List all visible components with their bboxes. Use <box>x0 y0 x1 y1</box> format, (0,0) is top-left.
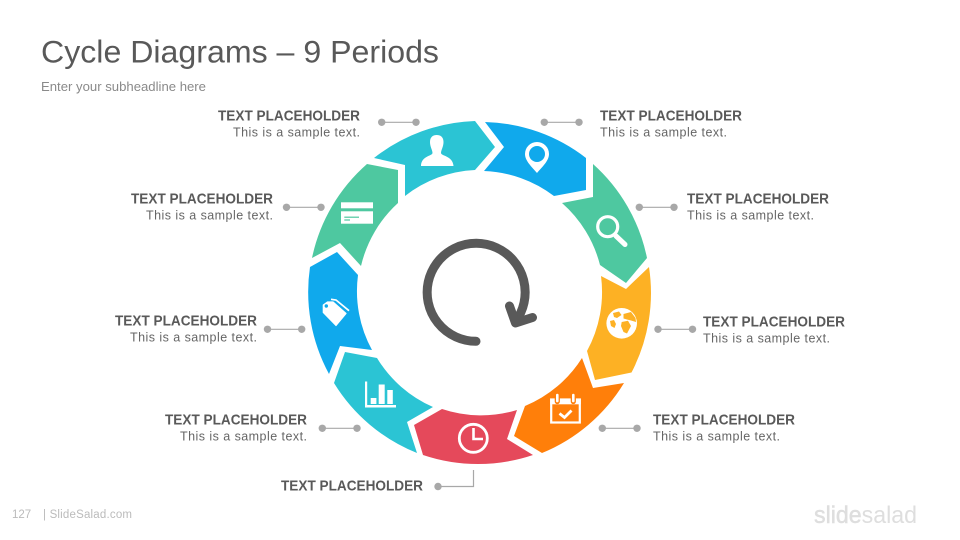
segment: yellow right with globe icon <box>587 267 651 380</box>
segment: teal lower left with bar chart icon <box>334 352 433 453</box>
cycle ring <box>308 121 651 464</box>
title: Cycle Diagrams – 9 Periods <box>41 34 439 70</box>
label: middle left <box>115 313 305 345</box>
icon: globe <box>606 308 637 339</box>
label: top right: This is a sample text. <box>600 126 727 140</box>
label: bottom <box>281 470 474 495</box>
subheadline: Enter your subheadline here <box>41 80 206 94</box>
label: top right <box>541 108 742 140</box>
label: middle right <box>654 314 845 346</box>
label: upper right <box>636 191 829 223</box>
label: upper right: This is a sample text. <box>687 209 814 223</box>
icon: map pin <box>525 142 549 173</box>
icon: card <box>341 202 373 224</box>
label: upper left: TEXT PLACEHOLDER <box>131 191 273 208</box>
label: lower right <box>599 412 795 444</box>
segment: green right with magnifier icon <box>562 164 647 283</box>
label: lower left: TEXT PLACEHOLDER <box>165 412 307 429</box>
label: lower right: TEXT PLACEHOLDER <box>653 412 795 429</box>
icon: price tag <box>323 299 349 326</box>
label: upper left <box>131 191 325 223</box>
label: top left: This is a sample text. <box>233 126 360 140</box>
label: upper right: TEXT PLACEHOLDER <box>687 191 829 208</box>
label: middle right: This is a sample text. <box>703 332 830 346</box>
segment: blue top with pin icon <box>484 122 586 196</box>
center cycle arrow <box>427 243 532 341</box>
label: lower left <box>165 412 361 444</box>
icon: person <box>421 135 454 166</box>
label: top right: TEXT PLACEHOLDER <box>600 108 742 125</box>
label: middle left: TEXT PLACEHOLDER <box>115 313 257 330</box>
segment: orange with calendar icon <box>514 358 624 453</box>
icon: magnifier <box>598 217 625 244</box>
segment: teal top with person icon <box>374 121 495 196</box>
segment: green left with card icon <box>312 164 398 266</box>
segment: blue left with tag icon <box>308 252 372 374</box>
label: bottom: TEXT PLACEHOLDER <box>281 478 423 495</box>
icon: clock <box>459 424 487 452</box>
icon: calendar <box>550 395 581 422</box>
segment: red bottom with clock icon <box>414 409 533 464</box>
label: lower left: This is a sample text. <box>180 430 307 444</box>
label: top left <box>218 108 420 140</box>
icon: bar chart <box>365 382 396 408</box>
logo wordmark: slidesalad <box>814 502 917 529</box>
footer site name: | SlideSalad.com <box>43 509 132 521</box>
label: lower right: This is a sample text. <box>653 430 780 444</box>
footer page number: 127 <box>12 509 31 521</box>
label: middle left: This is a sample text. <box>130 331 257 345</box>
label: upper left: This is a sample text. <box>146 209 273 223</box>
label: top left: TEXT PLACEHOLDER <box>218 108 360 125</box>
label: middle right: TEXT PLACEHOLDER <box>703 314 845 331</box>
